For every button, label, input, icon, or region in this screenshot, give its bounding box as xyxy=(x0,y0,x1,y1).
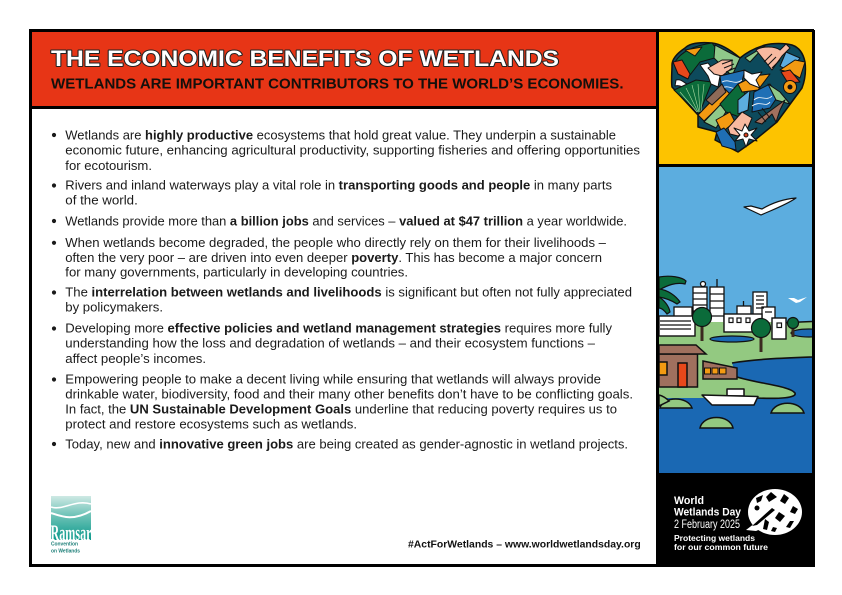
logo: Ramsar: Ramsar xyxy=(50,520,92,545)
boat xyxy=(702,389,758,405)
water xyxy=(659,357,812,473)
house xyxy=(659,345,737,387)
towers xyxy=(673,279,776,322)
icon: small bird xyxy=(788,297,807,303)
bullet: interrelation xyxy=(52,286,632,315)
bullet: UN goals: Empowering people to make a decent living while ensuring that wetlands will always provide xyxy=(65,373,601,387)
bullet: effective policies: Developing more effective policies and wetland management strategies requires more fully xyxy=(65,322,613,336)
bullet: transporting goods: Rivers and inland waterways play a vital role in transporting goods and people in many parts xyxy=(65,179,612,193)
tagline xyxy=(674,534,769,552)
bullet: highly productive: Wetlands are highly productive ecosystems that hold great value. They underpin a sustainable xyxy=(65,128,616,142)
bullet: interrelation: The interrelation between wetlands and livelihoods is significant but often not fully appreciated xyxy=(65,286,632,300)
title: THE ECONOMIC BENEFITS OF WETLANDS xyxy=(51,46,559,71)
icon: heart of hands xyxy=(672,43,805,152)
sky xyxy=(659,167,812,366)
World Wetlands Day label: World xyxy=(674,495,704,507)
ground xyxy=(659,322,812,398)
bullet: green jobs: Today, new and innovative green jobs are being created as gender-agnostic in wetland projects. xyxy=(65,437,628,451)
World Wetlands Day label xyxy=(674,495,742,518)
bullet: effective policies: understanding how the loss and degradation of wetlands – and their ecosystem functions – xyxy=(65,337,596,351)
World Wetlands Day label: Wetlands Day xyxy=(674,506,742,518)
text block: bullet list xyxy=(52,128,640,451)
bullet: effective policies: affect people’s incomes. xyxy=(65,352,206,366)
bullet: highly productive: economic future, enhancing agricultural productivity, supporting fisheries and offering opportunities xyxy=(65,144,640,158)
bullet: highly productive: for ecotourism. xyxy=(65,159,152,173)
bullet: poverty: When wetlands become degraded, the people who directly rely on them for their livelihoods – xyxy=(65,236,607,250)
date: 2 February 2025 xyxy=(674,519,740,531)
bullet: billion jobs: Wetlands provide more than a billion jobs and services – valued at $47 trillion a year worldwide. xyxy=(65,214,627,228)
ponds xyxy=(710,336,754,342)
bullet: poverty: often the very poor – are driven into even deeper poverty. This has become a major concern xyxy=(65,251,602,265)
tagline: for our common future xyxy=(674,543,769,552)
bullet: UN goals: protect and restore ecosystems such as wetlands. xyxy=(65,418,357,432)
buildings xyxy=(659,314,786,339)
bullet: UN goals xyxy=(52,373,633,432)
footer hashtag and url: #ActForWetlands – www.worldwetlandsday.org xyxy=(408,540,641,550)
panel: right column divider xyxy=(656,30,659,566)
logo: Ramsar xyxy=(50,496,92,554)
trees xyxy=(692,308,798,352)
panel: World Wetlands Day black tile xyxy=(659,30,815,567)
panel: yellow heart tile xyxy=(659,32,812,167)
icon: wetlands globe xyxy=(746,489,802,535)
bullet: poverty xyxy=(52,236,607,280)
islands xyxy=(659,395,804,428)
bullet: transporting goods: of the world. xyxy=(65,194,138,208)
bullet: UN goals: In fact, the UN Sustainable Development Goals underline that reducing poverty requires us to xyxy=(65,402,617,416)
tagline: Protecting wetlands xyxy=(674,534,756,543)
logo: Ramsar: on Wetlands xyxy=(51,548,80,554)
bullet: transporting goods xyxy=(52,179,612,208)
logo: Ramsar: Convention xyxy=(51,542,78,548)
bullet: effective policies xyxy=(52,322,613,366)
bullet: interrelation: by policymakers. xyxy=(65,301,163,315)
bullet: highly productive xyxy=(52,128,640,173)
subtitle: WETLANDS ARE IMPORTANT CONTRIBUTORS TO THE WORLD’S ECONOMIES. xyxy=(51,76,624,93)
bullet: poverty: for many governments, particularly in developing countries. xyxy=(65,266,408,280)
panel: wetland city scene xyxy=(659,167,827,473)
icon: large bird xyxy=(744,198,796,215)
palm tree xyxy=(659,276,686,314)
bullet: UN goals: drinkable water, biodiversity, food and their many other benefits don’t have to be conflicting goals. xyxy=(65,388,633,402)
panel: red header xyxy=(30,32,657,109)
